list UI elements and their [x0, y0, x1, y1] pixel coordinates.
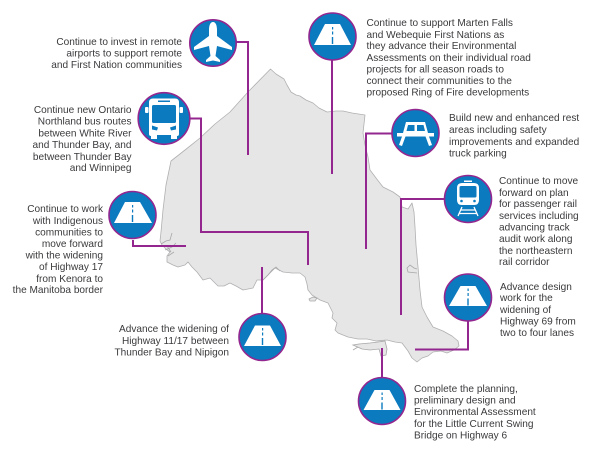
text: rest areas: areas including safety	[449, 125, 548, 136]
text: Highway 69: Highway 69 from	[500, 316, 576, 328]
text: bus routes	[33, 105, 132, 174]
text: rest areas	[449, 113, 579, 160]
text: Highway 17: from Kenora to	[36, 274, 103, 285]
text: rest areas: improvements and expanded	[449, 137, 579, 148]
text: passenger rail: services including	[499, 211, 579, 222]
text: bus routes: and Thunder Bay, and	[33, 140, 132, 151]
text: Ring of Fire: Assessments on their individual road	[366, 53, 531, 64]
text: Ring of Fire: Continue to support Marten Falls	[366, 18, 513, 29]
text: passenger rail: audit work along	[499, 234, 573, 245]
text: airports: airports to support remote	[66, 48, 182, 60]
text: Highway 17: with Indigenous	[32, 216, 103, 227]
text: Highway 17: communities to	[35, 228, 103, 238]
text: rest areas: Build new and enhanced rest	[449, 113, 579, 124]
text: Highway 69: two to four lanes	[500, 328, 574, 339]
text: airports	[51, 37, 182, 71]
text: Little Current bridge: preliminary design and	[414, 396, 516, 406]
text: bus routes: Continue new Ontario	[34, 105, 132, 116]
text: passenger rail: for passenger rail	[499, 199, 577, 210]
text: Ring of Fire: proposed Ring of Fire developments	[366, 88, 529, 98]
icon: road, Highway 11/17	[239, 314, 286, 360]
icon: road, Highway 17	[109, 192, 156, 238]
text: passenger rail: forward on plan	[499, 188, 569, 199]
text: Little Current bridge: Environmental Assessment	[414, 407, 536, 418]
text: Highway 17: of Highway 17	[39, 262, 103, 273]
text: passenger rail: the northeastern	[499, 246, 573, 257]
text: bus routes: between Thunder Bay	[33, 152, 132, 163]
text: bus routes: and Winnipeg	[70, 163, 132, 174]
map of Ontario	[160, 69, 459, 362]
text: Little Current bridge: Complete the planning,	[414, 384, 518, 395]
text: Ring of Fire: projects for all season roads to	[366, 64, 504, 76]
text: bus routes: between White River	[38, 128, 132, 140]
text: Little Current bridge: Bridge on Highway 6	[414, 430, 508, 442]
text: Highway 11/17: Thunder Bay and Nipigon	[115, 348, 229, 358]
text: Highway 17: move forward	[42, 239, 103, 250]
icon: road, Little Current	[358, 378, 406, 424]
text: Highway 17: with the widening	[25, 250, 103, 262]
text: Highway 69: widening of	[499, 305, 551, 316]
text: airports: Continue to invest in remote	[56, 37, 182, 48]
text: passenger rail: rail corridor	[499, 257, 550, 268]
text: Highway 11/17	[115, 324, 229, 358]
icon: airplane	[190, 20, 236, 66]
text: Highway 69: Advance design	[500, 282, 572, 293]
icon: road, Highway 69	[444, 274, 492, 321]
text: Highway 69	[499, 282, 576, 339]
text: Highway 11/17: Advance the widening of	[119, 324, 229, 335]
text: Ring of Fire: they advance their Environmental	[366, 41, 516, 52]
text: Highway 11/17: Highway 11/17 between	[122, 336, 229, 347]
text: Highway 17: the Manitoba border	[13, 285, 104, 296]
text: Ring of Fire: and Webequie First Nations as	[366, 30, 504, 41]
text: bus routes: Northland bus routes	[38, 116, 132, 128]
text: Highway 17	[13, 204, 104, 296]
icon: train	[444, 176, 492, 222]
text: Little Current bridge	[414, 384, 536, 442]
text: Highway 17: Continue to work	[27, 204, 104, 215]
icon: bus	[138, 93, 190, 144]
text: Ring of Fire	[366, 18, 531, 98]
connector lines	[133, 42, 468, 378]
text: Highway 69: work for the	[499, 293, 553, 304]
text: rest areas: truck parking	[449, 148, 507, 160]
text: passenger rail: advancing track	[499, 222, 571, 234]
text: Little Current bridge: for the Little Current Swing	[414, 419, 534, 430]
text: passenger rail	[499, 176, 579, 268]
icon: picnic table	[392, 110, 439, 156]
icon: road, Ring of Fire	[309, 13, 356, 60]
text: Ring of Fire: connect their communities to the	[366, 76, 512, 87]
text: airports: and First Nation communities	[51, 60, 182, 71]
text: passenger rail: Continue to move	[499, 176, 579, 187]
